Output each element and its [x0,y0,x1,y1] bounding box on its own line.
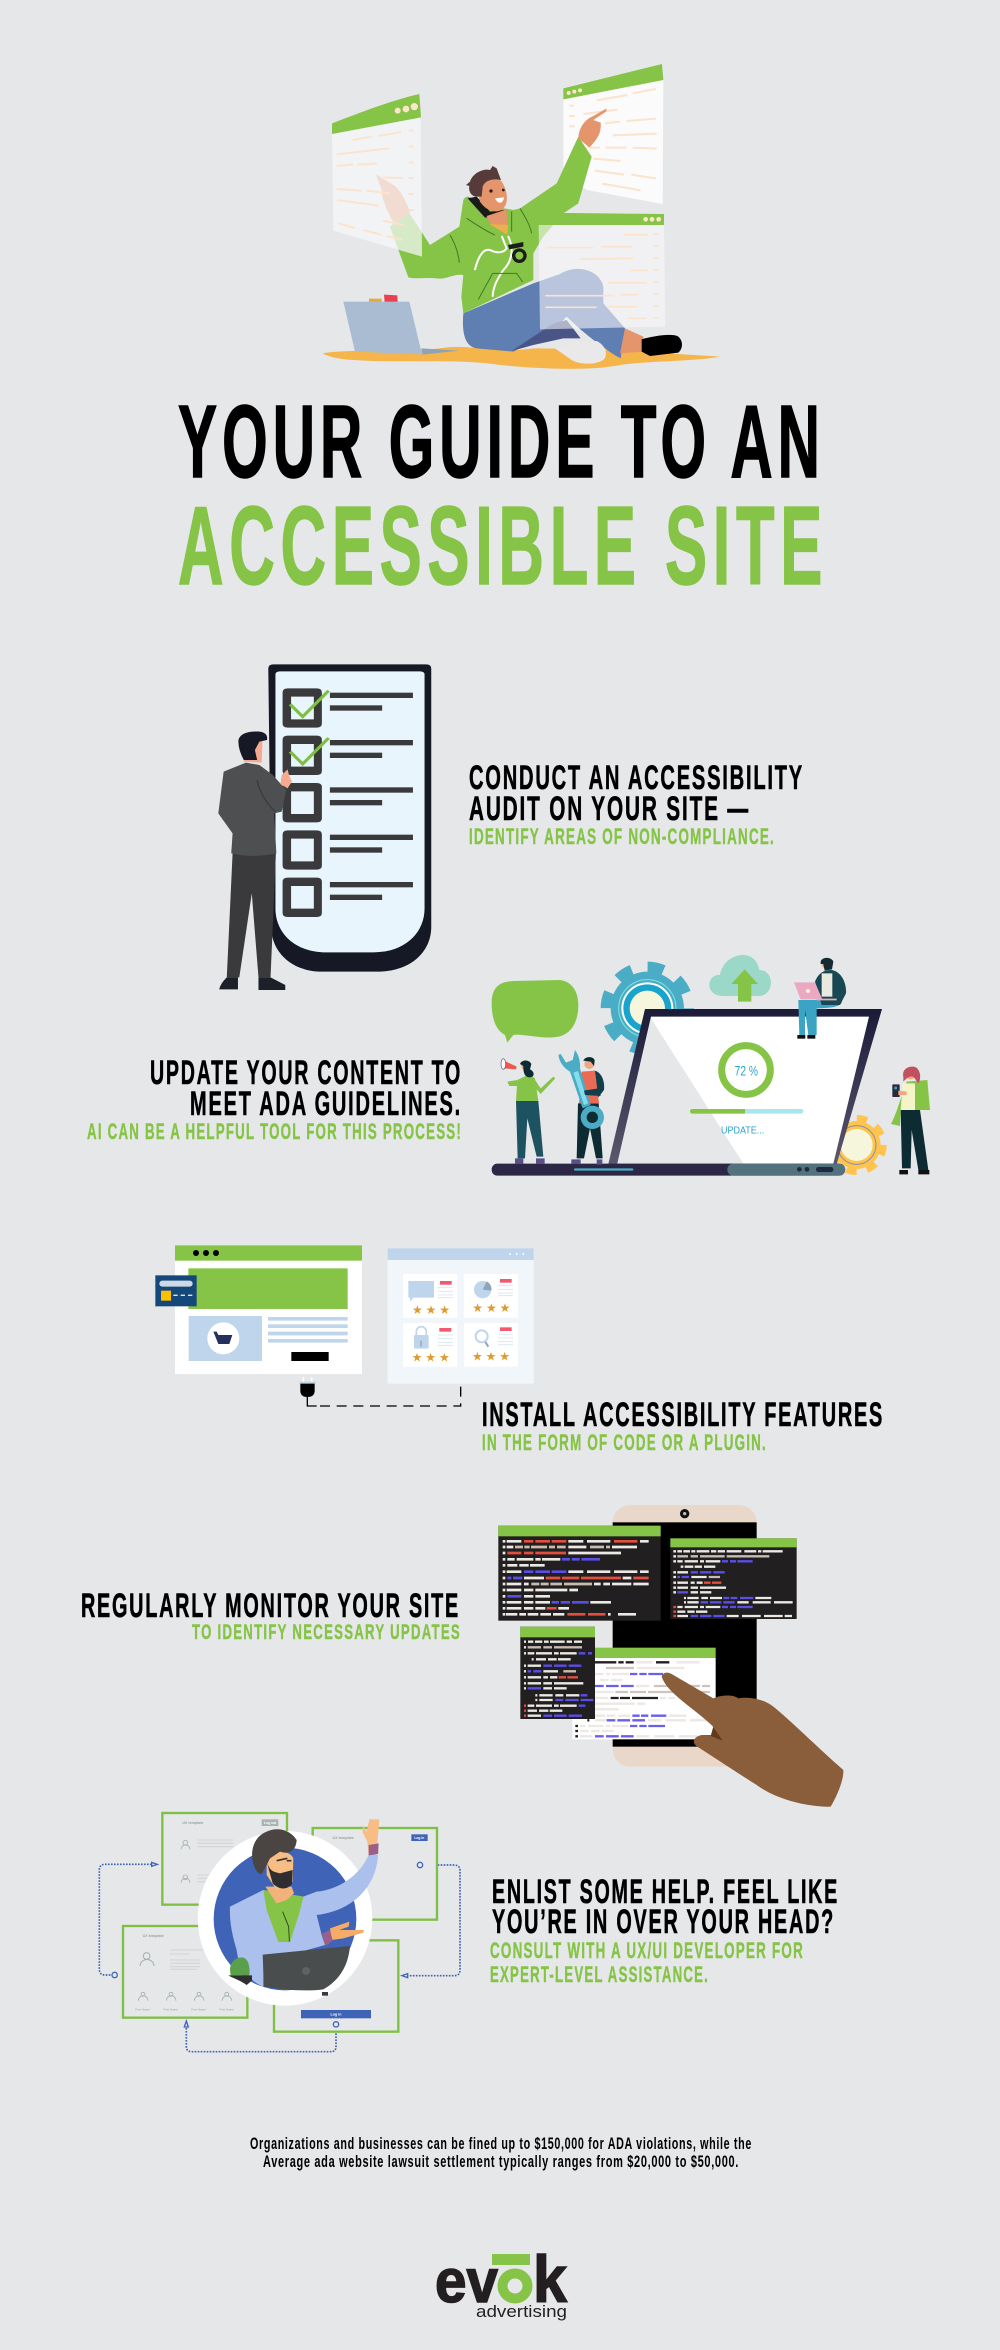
cactus [230,1957,250,1975]
yellow gear [830,1119,883,1171]
template frame: top left [162,1813,287,1905]
feature card: magnifier: ★ [499,1350,510,1364]
template frame: bottom right [274,1940,398,2032]
footnote: Organizations and businesses can be fined up to $150,000 for ADA violations, while the [250,2135,752,2153]
feature card: chat: ★ [439,1303,450,1317]
code window: right [670,1538,797,1619]
footnote: Average ada website lawsuit settlement typically ranges from $20,000 to $50,000. [263,2153,739,2171]
feature card: magnifier [464,1323,518,1367]
man with wrench [558,1050,604,1165]
cloud upload icon [709,955,771,1002]
checklist rows [283,688,413,917]
template frame: top left: Log out [264,1821,277,1825]
subheading: IN THE FORM OF CODE OR A PLUGIN. [482,1430,767,1455]
head [477,178,507,211]
logo: evok advertising: k [533,2242,567,2316]
feature card: lock: ★ [439,1350,450,1364]
code window: white [572,1648,716,1739]
head [267,1851,293,1890]
subheading: AI CAN BE A HELPFUL TOOL FOR THIS PROCESS! [87,1119,462,1144]
template frame: top right: UX template [333,1836,354,1840]
heading: REGULARLY MONITOR YOUR SITE [81,1587,460,1625]
blue gear [607,968,688,1049]
feature card: pie chart: ★ [486,1301,497,1315]
feature card: lock: ★ [425,1350,436,1364]
step 2 illustration: laptop update with people [492,955,930,1176]
title [178,384,828,608]
subheading: CONSULT WITH A UX/UI DEVELOPER FOR [490,1938,804,1963]
hood inner, neck and shirt [468,197,504,218]
woman with tablet [891,1067,930,1174]
step 4 text [81,1587,461,1644]
arrowheads and nodes [112,1862,423,2027]
feature card: chat [403,1274,457,1318]
template frame: bottom left: First Name [163,2008,178,2012]
icon: shopping cart [213,1332,232,1344]
subheading: TO IDENTIFY NECESSARY UPDATES [192,1621,461,1644]
hand pointing [662,1673,843,1807]
footnote [250,2135,752,2171]
progress value: 72 % [735,1062,758,1078]
feature card: chat: ★ [412,1303,423,1317]
feature card: lock: ★ [412,1350,422,1364]
speech bubble [492,980,578,1043]
code window: small [520,1627,595,1719]
phone body [268,664,431,972]
logo: evok advertising: advertising [476,2302,567,2321]
raised hand [363,1819,379,1855]
step 2 text [87,1054,462,1144]
hero illustration: person pointing at browser windows [323,64,720,369]
node on top right frame [417,1862,423,1868]
template frame: top right [313,1828,437,1920]
green check marks [290,691,329,764]
icon: credit card [155,1275,197,1306]
dotted flow arrows [99,1864,460,2052]
jeans [463,269,625,358]
rug [323,347,720,369]
browser window: top right [563,64,663,204]
feature card: pie chart [464,1274,518,1318]
step 1 text [469,759,804,849]
feature card: pie chart: ★ [500,1301,510,1315]
hoodie [390,137,592,313]
feature card: magnifier: ★ [486,1350,496,1364]
step 3 text [482,1396,884,1455]
open hand [330,1922,364,1940]
step 1 illustration: man at checklist phone [218,664,431,990]
step 5 illustration: developer with UX templates [99,1813,460,2052]
phone screen [275,671,425,952]
developer character [228,1819,379,1990]
template frame: top left: UX template [182,1821,203,1825]
browser window: bottom right (translucent) [539,213,665,329]
feature card: chat: ★ [426,1303,436,1317]
template frame: bottom right: Log in [331,2013,341,2017]
template frame: bottom left: First Name [135,2008,150,2012]
phone [613,1505,757,1767]
man on laptop [794,958,846,1039]
template frame: bottom left: First Name [191,2008,206,2012]
man in suit [218,732,292,990]
laptop base [492,1164,845,1176]
progress bar [690,1109,803,1114]
template frame: top right: Log in [414,1836,424,1840]
feature card: lock [403,1323,457,1367]
step 2 text: MEET ADA GUIDELINES. [190,1085,462,1123]
woman with megaphone [501,1059,555,1164]
jacket and arm [230,1853,378,1987]
laptop [343,295,459,355]
update label: UPDATE... [721,1125,764,1136]
logo: evok advertising: ev [435,2247,498,2315]
step 4 illustration: phone with code windows and hand [498,1505,843,1807]
laptop [492,1009,882,1176]
step 3 illustration: plugin connecting to site [155,1245,534,1406]
heading: UPDATE YOUR CONTENT TO [150,1054,462,1092]
left hand [376,174,410,225]
template frame: bottom left [123,1926,247,2018]
plugin window [388,1248,534,1384]
feature card: magnifier: ★ [472,1350,483,1364]
browser window: left (translucent) [332,94,422,257]
portrait circle [198,1831,372,2006]
step 5 text [490,1873,839,1987]
main browser window [175,1245,362,1374]
step 5 text: EXPERT-LEVEL ASSISTANCE. [490,1962,709,1987]
step 1 text: AUDIT ON YOUR SITE — [469,790,750,828]
progress donut [722,1046,770,1094]
subheading: IDENTIFY AREAS OF NON-COMPLIANCE. [469,824,775,849]
icon: plug with dashed cable [299,1377,461,1406]
laptop [263,1946,350,1990]
feature card: pie chart: ★ [472,1301,483,1315]
feet and shoes [620,328,643,353]
template frame: bottom left: UX template [143,1934,164,1938]
right hand [578,108,607,147]
person in green hoodie [376,108,682,364]
code window: large [498,1526,661,1621]
hoodie cords and logo [475,237,512,296]
template frame: bottom left: First Name [219,2008,234,2012]
logo: evok advertising [435,2242,567,2321]
